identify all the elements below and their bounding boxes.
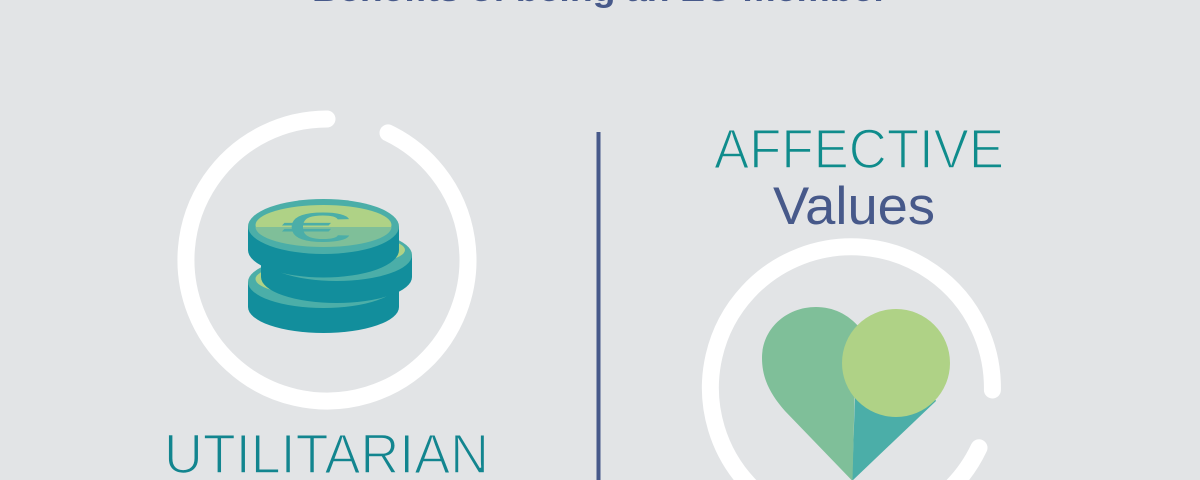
- subheading: values: Values: [773, 177, 935, 236]
- ring: utilitarian: [186, 119, 468, 401]
- panel: affective values: [710, 117, 1004, 480]
- heading: affective: AFFECTIVE: [714, 117, 1004, 180]
- divider between panels: [596, 132, 600, 480]
- icon: stack of euro coins: [248, 199, 412, 333]
- euro symbol: €: [281, 203, 351, 250]
- icon: heart: [762, 307, 950, 480]
- ring: affective: [710, 247, 992, 480]
- panel: utilitarian: [164, 119, 489, 480]
